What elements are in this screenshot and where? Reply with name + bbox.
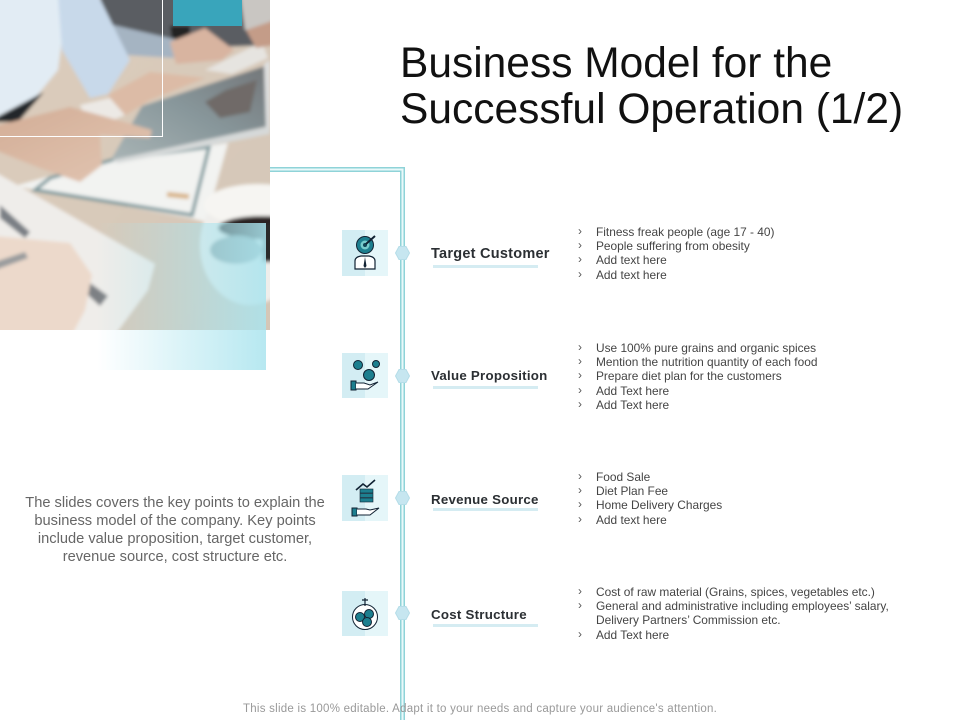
row: value proposition [342,353,548,398]
list: target customer points: People suffering from obesity [596,239,750,253]
list: target customer points: Add text here [596,268,667,282]
teal square accent [173,0,242,26]
list: cost structure points: Add Text here [596,628,669,642]
list: revenue source points [578,470,722,527]
hexagon node [395,369,410,383]
list: revenue source points: Add text here [596,513,667,527]
list: value proposition points: Mention the nutrition quantity of each food [596,355,817,369]
list: revenue source points: Diet Plan Fee [596,484,668,498]
photo: business people with tablet at desk [0,0,270,330]
list: target customer points: Fitness freak people (age 17 - 40) [596,225,774,239]
heading underline [433,624,538,627]
description text block: revenue source, cost structure etc. [63,549,287,565]
description text block: business model of the company. Key points [34,513,316,529]
white outline frame [0,0,163,137]
heading: Cost Structure [431,607,527,622]
title: Successful Operation (1/2) [400,86,903,133]
list: cost structure points [578,585,889,642]
heading: Revenue Source [431,492,539,507]
list: target customer points: Add text here [596,253,667,267]
heading underline [433,265,538,268]
icon: coins in circular arrows [342,591,388,636]
hexagon node [395,246,410,260]
icon: target and person [342,230,388,276]
list: cost structure points: Cost of raw material (Grains, spices, vegetables etc.) [596,585,875,599]
title: Business Model for the [400,40,832,87]
row: target customer [342,230,550,276]
row: cost structure [342,591,538,636]
gradient teal overlay [97,223,266,370]
timeline connector line [270,167,405,720]
list: cost structure points: Delivery Partners’ Commission etc. [596,613,781,627]
list: value proposition points: Add Text here [596,398,669,412]
list: revenue source points: Home Delivery Charges [596,498,722,512]
description text block: The slides covers the key points to explain the [25,495,325,511]
heading underline [433,386,538,389]
title [400,40,903,133]
heading: Target Customer [431,246,550,262]
icon: hand with rising coins [342,475,388,521]
description text block [25,495,325,565]
list: value proposition points [578,341,817,412]
heading: Value Proposition [431,368,548,383]
row: revenue source [342,475,539,521]
list: revenue source points: Food Sale [596,470,650,484]
description text block: include value proposition, target customer, [38,531,312,547]
hexagon node [395,491,410,505]
icon: hand with coins [342,353,388,398]
list: value proposition points: Use 100% pure grains and organic spices [596,341,816,355]
hexagon node [395,606,410,620]
heading underline [433,508,538,511]
list: target customer points [578,225,774,282]
list: value proposition points: Prepare diet plan for the customers [596,369,782,383]
list: cost structure points: General and administrative including employees’ salary, [596,599,889,613]
footer note: This slide is 100% editable. Adapt it to your needs and capture your audience's attention. [243,703,717,715]
list: value proposition points: Add Text here [596,384,669,398]
